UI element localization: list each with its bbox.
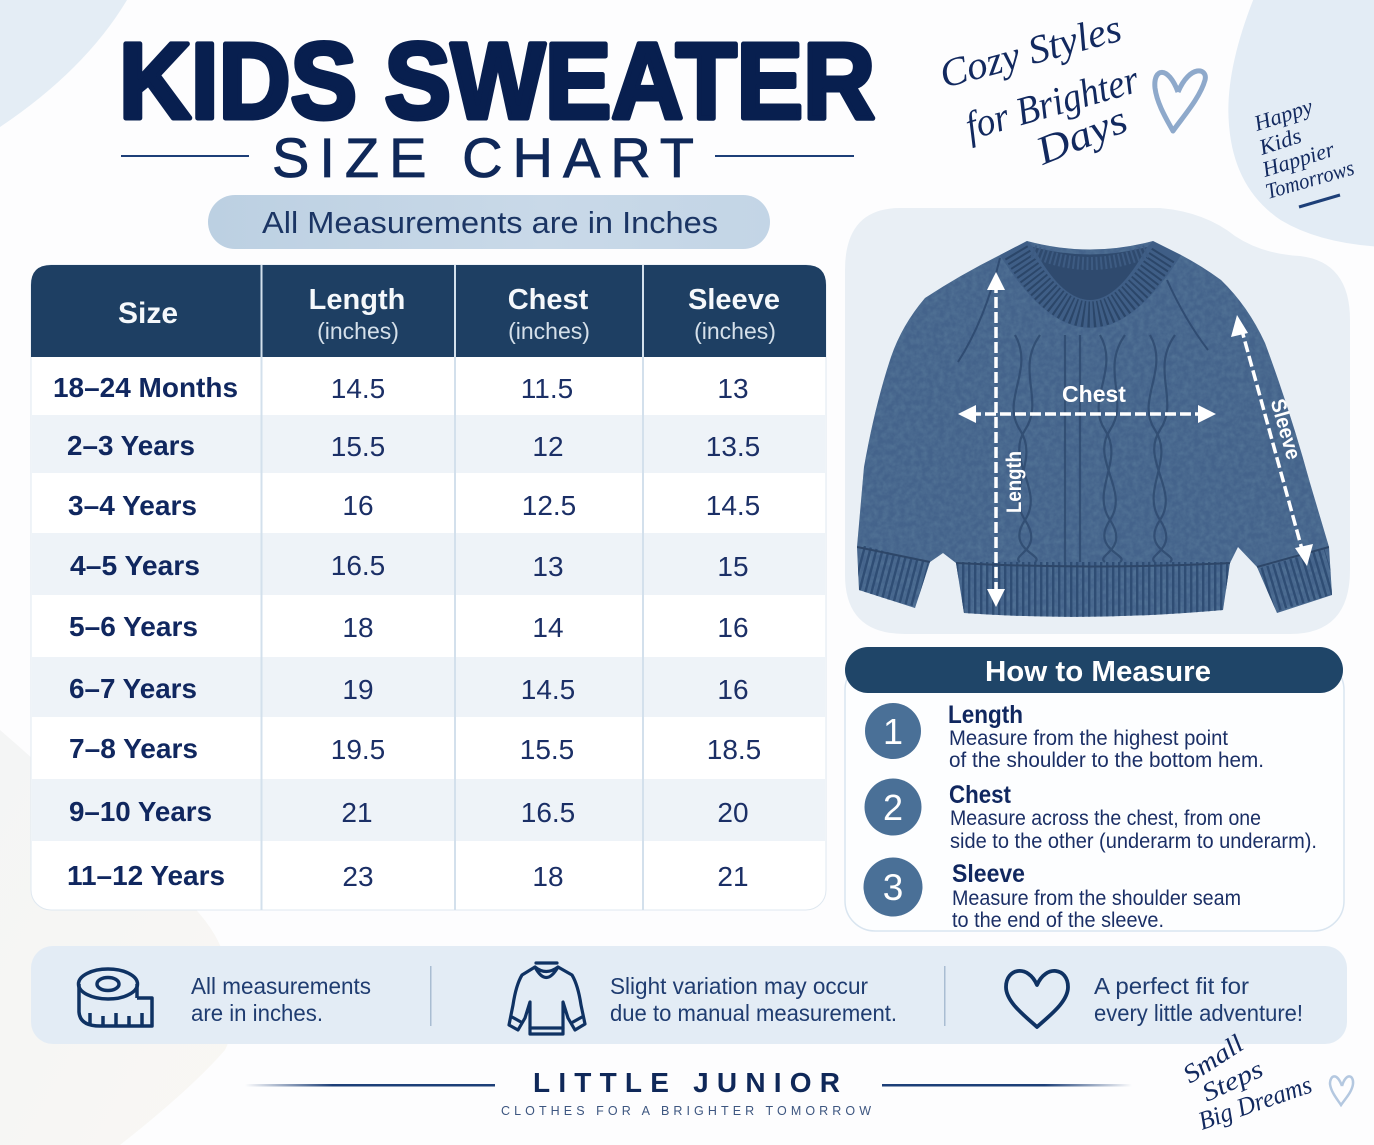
- table header: Sleeve: [688, 284, 780, 316]
- step 2: chest: 2: [883, 787, 903, 828]
- decorative blob: top right: [1226, 0, 1374, 249]
- label: sleeve: Sleeve: [1266, 396, 1305, 462]
- step 3: sleeve: to the end of the sleeve.: [952, 909, 1164, 932]
- table row: 9-10 years: 21: [341, 797, 373, 828]
- note: measurements: [191, 973, 371, 1026]
- table row: 6-7 years: 14.5: [521, 674, 575, 705]
- table row: 9-10 years: [69, 796, 749, 828]
- table row: 9-10 years: 9–10 Years: [69, 796, 212, 827]
- step 3: sleeve: 3: [883, 867, 903, 908]
- step 3: sleeve: [864, 858, 1241, 932]
- table row: 4-5 years: [70, 550, 749, 582]
- table row: 11-12 years: 18: [532, 861, 564, 892]
- step 1: length: Measure from the highest point: [949, 727, 1228, 750]
- note: perfect fit: [1094, 973, 1303, 1026]
- table row: 11-12 years: 23: [342, 861, 374, 892]
- label: length: Length: [1003, 451, 1026, 513]
- script: happy kids: Kids: [1255, 123, 1304, 160]
- measurement note pill: [208, 195, 770, 249]
- table row: 2-3 years: 12: [532, 431, 564, 462]
- script: cozy styles: for Brighter: [960, 56, 1144, 149]
- script: small steps: Steps: [1197, 1054, 1268, 1107]
- table column dividers: [260, 265, 644, 910]
- script: happy kids: Tomorrows: [1262, 155, 1357, 204]
- note: measurements: are in inches.: [191, 1000, 323, 1026]
- table header: (inches): [508, 318, 590, 344]
- arrow: sleeve: [1231, 315, 1313, 566]
- table row: 3-4 years: 12.5: [522, 490, 576, 521]
- icon: measuring tape: [78, 969, 152, 1026]
- step 1: length: Length: [948, 701, 1023, 729]
- table row: 4-5 years: 16.5: [331, 550, 385, 581]
- note: variation: due to manual measurement.: [610, 1000, 897, 1026]
- table row: 2-3 years: 2–3 Years: [67, 430, 195, 461]
- table row: 5-6 years: 5–6 Years: [69, 611, 198, 642]
- footer brand: CLOTHES FOR A BRIGHTER TOMORROW: [501, 1104, 871, 1118]
- table row: 4-5 years: 15: [717, 551, 749, 582]
- script: cozy styles: Cozy Styles: [935, 5, 1126, 97]
- table row: 6-7 years: 16: [717, 674, 749, 705]
- step 2: chest: Chest: [949, 781, 1012, 809]
- table row: 6-7 years: [69, 673, 749, 705]
- icon: sweater: [509, 963, 585, 1034]
- table row: 11-12 years: [67, 860, 749, 892]
- table header: (inches): [317, 318, 399, 344]
- table row: 18-24 months: 18–24 Months: [53, 372, 238, 403]
- note: variation: Slight variation may occur: [610, 973, 868, 999]
- table row: 9-10 years: 16.5: [521, 797, 575, 828]
- table row: 5-6 years: [69, 611, 749, 643]
- script: cozy styles: Days: [1028, 96, 1134, 174]
- table row: 18-24 months: 13: [717, 373, 749, 404]
- step 1: length: of the shoulder to the bottom hem.: [949, 749, 1264, 772]
- table header: Chest: [508, 284, 589, 316]
- label: chest: Chest: [1062, 381, 1126, 407]
- step 2: chest: side to the other (underarm to underarm).: [950, 830, 1317, 853]
- note: perfect fit: A perfect fit for: [1094, 973, 1249, 999]
- table header: Length: [309, 284, 405, 316]
- table stripes: [32, 415, 825, 841]
- how to measure heading: [845, 647, 1343, 693]
- table row: 7-8 years: 15.5: [520, 734, 574, 765]
- script: happy kids: Happier: [1258, 136, 1338, 182]
- table row: 11-12 years: 11–12 Years: [67, 860, 225, 891]
- icon: heart outline: [1006, 971, 1068, 1027]
- panel: sweater diagram: [845, 208, 1350, 634]
- note: variation: [610, 973, 897, 1026]
- note: perfect fit: every little adventure!: [1094, 1000, 1303, 1026]
- size table: [31, 265, 826, 910]
- table header: Size: [118, 297, 178, 330]
- script: happy kids: [1250, 93, 1357, 207]
- step 3: sleeve: Measure from the shoulder seam: [952, 887, 1241, 910]
- panel: how to measure: [845, 647, 1344, 932]
- table row: 4-5 years: 4–5 Years: [70, 550, 200, 581]
- table row: 11-12 years: 21: [717, 861, 749, 892]
- arrow: length: [987, 272, 1005, 607]
- measurement note pill: All Measurements are in Inches: [262, 205, 718, 240]
- table row: 2-3 years: 15.5: [331, 431, 385, 462]
- table header: (inches): [694, 318, 776, 344]
- table row: 3-4 years: 14.5: [706, 490, 760, 521]
- table row: 3-4 years: 16: [342, 490, 374, 521]
- table row: 9-10 years: 20: [717, 797, 749, 828]
- table row: 18-24 months: [53, 372, 749, 404]
- table row: 4-5 years: 13: [532, 551, 564, 582]
- table row: 5-6 years: 16: [717, 612, 749, 643]
- footer brand: [245, 1067, 1132, 1118]
- step 1: length: [865, 701, 1264, 772]
- how to measure heading: How to Measure: [985, 656, 1211, 688]
- step 2: chest: Measure across the chest, from one: [950, 807, 1261, 830]
- table row: 5-6 years: 14: [532, 612, 564, 643]
- script: small steps: Small: [1177, 1029, 1249, 1089]
- subtitle: SIZE CHART: [272, 126, 694, 189]
- table row: 5-6 years: 18: [342, 612, 374, 643]
- script: cozy styles: [935, 5, 1144, 174]
- script: small steps: [1177, 1029, 1316, 1136]
- illustration: blue knit sweater: [850, 235, 1340, 620]
- note: measurements: All measurements: [191, 973, 371, 999]
- title: KIDS SWEATER: [119, 20, 875, 141]
- table row: 2-3 years: 13.5: [706, 431, 760, 462]
- table row: 7-8 years: 7–8 Years: [69, 733, 198, 764]
- table row: 2-3 years: [67, 430, 760, 462]
- table row: 6-7 years: 6–7 Years: [69, 673, 197, 704]
- script: small steps: Big Dreams: [1195, 1070, 1316, 1136]
- table row: 7-8 years: [69, 733, 761, 765]
- step 3: sleeve: Sleeve: [952, 860, 1025, 888]
- footer brand: LITTLE JUNIOR: [533, 1067, 840, 1098]
- table row: 7-8 years: 19.5: [331, 734, 385, 765]
- panel: notes bar: [31, 946, 1347, 1044]
- step 1: length: 1: [883, 711, 903, 752]
- step 2: chest: [864, 778, 1317, 853]
- table row: 6-7 years: 19: [342, 674, 374, 705]
- script: happy kids: Happy: [1250, 93, 1316, 136]
- table row: 18-24 months: 11.5: [521, 373, 573, 404]
- table row: 3-4 years: 3–4 Years: [68, 490, 197, 521]
- table row: 7-8 years: 18.5: [707, 734, 761, 765]
- icon: script heart: [1155, 71, 1205, 131]
- table row: 18-24 months: 14.5: [331, 373, 385, 404]
- table header: [31, 265, 826, 357]
- icon: small heart: [1330, 1076, 1353, 1105]
- table row: 3-4 years: [68, 490, 760, 521]
- arrow: chest: [958, 405, 1216, 423]
